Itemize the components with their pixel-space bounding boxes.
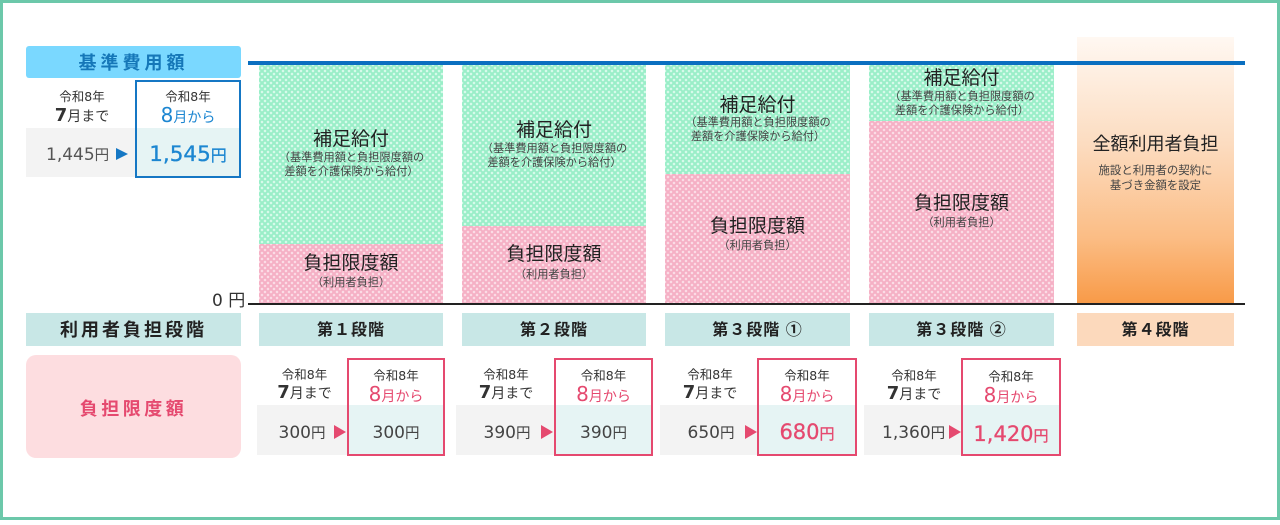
arrow <box>745 425 757 439</box>
heading: supplementary benefit: 補足給付 <box>313 129 389 150</box>
value background <box>257 405 349 455</box>
stage 4 label: 第４段階 <box>1121 322 1190 339</box>
label: from August: 令和8年 <box>784 368 830 383</box>
panel: stage 2 prices <box>456 358 653 456</box>
label: from August: 令和8年 <box>165 89 211 104</box>
value: 390 yen: 390円 <box>484 423 530 443</box>
heading: burden limit: 負担限度額 <box>80 399 187 419</box>
arrow <box>116 148 128 160</box>
supplementary benefit area <box>462 65 646 226</box>
text: fourth stage note: 施設と利用者の契約に <box>1099 165 1212 177</box>
label: until July <box>479 367 533 403</box>
text: benefit note <box>889 90 1035 117</box>
supplementary benefit area <box>869 65 1054 121</box>
heading: supplementary benefit: 補足給付 <box>719 95 796 116</box>
text: benefit note: （基準費用額と負担限度額の <box>482 143 627 155</box>
label: until July: 令和8年 <box>891 368 937 383</box>
value: 1,445 yen: 1,445円 <box>46 145 109 165</box>
stage 4 label <box>1077 313 1234 346</box>
label: from August: 令和8年 <box>988 369 1034 384</box>
label: until July: 令和8年 <box>282 367 327 382</box>
label: from August: 8月から <box>369 382 423 406</box>
text: benefit note: （基準費用額と負担限度額の <box>889 91 1035 103</box>
label: zero yen: 0 円 <box>212 291 245 311</box>
value: 390 yen: 390円 <box>580 423 627 443</box>
panel: base cost before and after <box>26 80 241 178</box>
label: from August: 8月から <box>576 382 631 406</box>
stage 1 label <box>259 313 443 346</box>
box: from August <box>554 358 653 456</box>
text: benefit note: （基準費用額と負担限度額の <box>279 152 424 164</box>
value background <box>660 405 760 455</box>
text: burden note: （利用者負担） <box>718 240 797 252</box>
label: until July <box>277 367 332 403</box>
stage 2 label: 第２段階 <box>520 322 588 339</box>
text: burden note: （利用者負担） <box>312 277 390 289</box>
heading: base cost: 基準費用額 <box>78 53 188 73</box>
heading: full self-pay: 全額利用者負担 <box>1092 134 1218 154</box>
label: from August: 令和8年 <box>581 368 626 383</box>
stage 3-2 label <box>869 313 1054 346</box>
burden limit area <box>869 121 1054 304</box>
stage 2 label <box>462 313 646 346</box>
value: 1,360 yen: 1,360円 <box>882 423 945 443</box>
label: until July: 令和8年 <box>687 367 733 382</box>
stage 3-2 label: 第３段階 ② <box>916 322 1007 339</box>
label: until July: 令和8年 <box>59 89 105 104</box>
label: from August: 8月から <box>161 103 215 127</box>
panel: stage 3-1 prices <box>660 358 857 456</box>
label: until July: 7月まで <box>887 383 941 404</box>
text: benefit note: 差額を介護保険から給付） <box>691 131 825 143</box>
heading: user burden stage <box>26 313 241 346</box>
value: 680 yen: 680円 <box>779 420 835 444</box>
stage 3-1 label <box>665 313 850 346</box>
arrow <box>334 425 346 439</box>
text: benefit note <box>482 142 627 169</box>
supplementary benefit area <box>665 65 850 174</box>
label: until July <box>683 367 737 403</box>
value: 1,545 yen: 1,545円 <box>149 142 227 167</box>
burden limit area <box>665 174 850 304</box>
panel: stage 3-2 prices <box>864 358 1061 456</box>
label: until July: 7月まで <box>55 105 109 126</box>
arrow <box>541 425 553 439</box>
supplementary benefit area <box>259 65 443 244</box>
text: fourth stage note: 基づき金額を設定 <box>1110 180 1201 192</box>
text: benefit note: 差額を介護保険から給付） <box>487 157 622 169</box>
value: 1,420 yen: 1,420円 <box>973 422 1049 446</box>
box: from August <box>135 80 241 178</box>
heading: base cost <box>26 46 241 78</box>
panel: stage 1 bar <box>259 65 443 303</box>
panel: stage 1 prices <box>257 358 445 456</box>
text: burden note: （利用者負担） <box>515 269 593 281</box>
text: benefit note: （基準費用額と負担限度額の <box>685 117 831 129</box>
heading: burden limit: 負担限度額 <box>303 253 398 274</box>
value background <box>456 405 556 455</box>
value: 300 yen: 300円 <box>373 423 419 443</box>
text: benefit note <box>685 116 831 143</box>
heading: supplementary benefit: 補足給付 <box>516 120 592 141</box>
zero axis line <box>248 303 1245 305</box>
label: from August <box>576 368 631 406</box>
box: from August <box>961 358 1061 456</box>
value: 650 yen: 650円 <box>688 423 734 443</box>
label: from August <box>780 368 834 406</box>
value: 300 yen: 300円 <box>279 423 325 443</box>
label: from August <box>369 368 423 406</box>
burden limit area <box>259 244 443 304</box>
label: from August <box>161 89 215 127</box>
value background: until July <box>26 128 136 177</box>
panel: stage 3-2 bar <box>869 65 1054 303</box>
box: from August <box>347 358 445 456</box>
stage 3-1 label: 第３段階 ① <box>712 322 803 339</box>
label: from August: 8月から <box>780 382 834 406</box>
value background <box>864 405 964 455</box>
label: from August: 令和8年 <box>373 368 419 383</box>
panel: fourth stage full self-pay column <box>1077 37 1234 304</box>
label: from August <box>984 369 1038 407</box>
text: benefit note <box>279 151 424 178</box>
burden limit area <box>462 226 646 304</box>
base cost line <box>248 61 1245 65</box>
heading: supplementary benefit: 補足給付 <box>923 68 1000 89</box>
heading: user burden stage: 利用者負担段階 <box>60 320 207 340</box>
heading: burden limit: 負担限度額 <box>506 244 602 265</box>
text: burden note: （利用者負担） <box>922 217 1001 229</box>
label: from August: 8月から <box>984 383 1038 407</box>
label: until July: 令和8年 <box>483 367 529 382</box>
label: until July: 7月まで <box>277 382 332 403</box>
text: benefit note: 差額を介護保険から給付） <box>895 105 1029 117</box>
panel: stage 2 bar <box>462 65 646 303</box>
label: until July <box>55 89 109 126</box>
label: until July: 7月まで <box>683 382 737 403</box>
stage 1 label: 第１段階 <box>317 322 385 339</box>
text: benefit note: 差額を介護保険から給付） <box>284 166 419 178</box>
label: until July <box>887 368 941 404</box>
label: until July: 7月まで <box>479 382 533 403</box>
heading: burden limit <box>26 355 241 458</box>
box: from August <box>757 358 857 456</box>
heading: burden limit: 負担限度額 <box>914 193 1009 214</box>
text: fourth stage note <box>1098 164 1212 192</box>
panel: stage 3-1 bar <box>665 65 850 303</box>
heading: burden limit: 負担限度額 <box>710 216 805 237</box>
arrow <box>949 425 961 439</box>
